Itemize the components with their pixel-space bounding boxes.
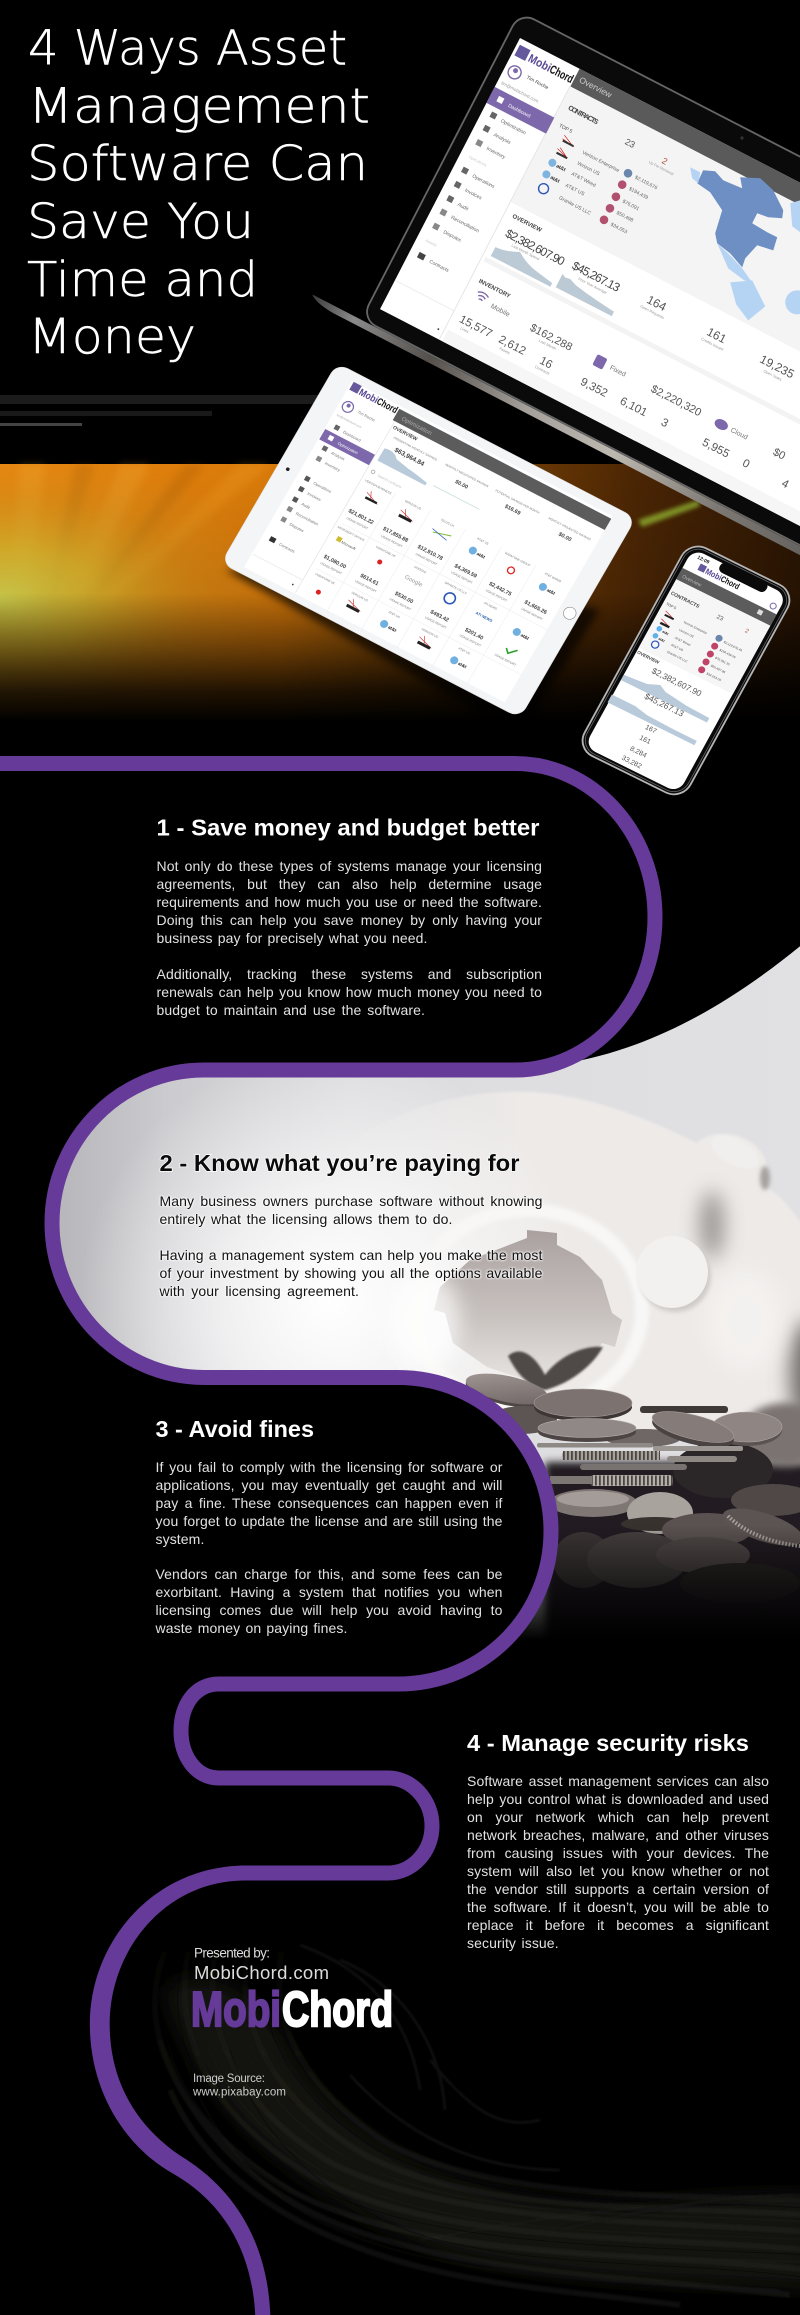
laptop sidebar: tim@mobichord.com <box>500 80 540 104</box>
phone overview <box>585 649 724 786</box>
tablet contract cards: VERIZON US <box>421 627 439 639</box>
phone mockup <box>576 540 796 800</box>
phone contracts: $34,053.05 <box>706 672 722 682</box>
section 3 text: licensing comes due will help you avoid having to <box>156 1602 502 1618</box>
phone logo <box>696 563 742 591</box>
photo backdrop <box>60 946 800 1636</box>
tablet sidebar: Inventory <box>324 461 341 473</box>
tablet contract cards: AT&T US <box>476 537 489 546</box>
heading: section 2: 2 - Know what you’re paying for <box>160 1150 520 1176</box>
tablet contract cards: USAGE REPORT <box>424 615 447 630</box>
tablet contract cards: TELUS CA <box>440 518 455 528</box>
tablet contract cards: MICROSOFT OFFICE <box>337 525 365 542</box>
overview panel: Open Tasks <box>763 369 782 382</box>
tablet body <box>221 363 636 718</box>
inventory panel: Cloud <box>729 427 749 442</box>
laptop sidebar: Analysis <box>492 132 512 146</box>
section 2 text: Many business owners purchase software without knowing <box>160 1193 542 1209</box>
tablet contract cards: $614.61 <box>359 573 379 587</box>
tablet contract cards: ATI NEWS <box>475 611 493 623</box>
phone frame <box>576 540 796 800</box>
heading: section 3: 3 - Avoid fines <box>156 1416 314 1442</box>
tablet contract cards: $1,665.26 <box>523 600 548 616</box>
tablet contract cards: at&t <box>476 551 486 560</box>
inventory panel <box>442 276 800 663</box>
tablet mockup <box>221 363 636 718</box>
image source credit: www.pixabay.com <box>192 2086 286 2098</box>
contracts panel: at&t <box>555 163 567 173</box>
overview panel: OVERVIEW <box>511 214 543 234</box>
purple ribbon path <box>0 764 655 2315</box>
contracts panel: $34,053 <box>609 222 628 235</box>
tablet contract cards: $17,855.88 <box>382 526 409 544</box>
phone contracts <box>639 579 770 694</box>
heading: section 1: 1 - Save money and budget better <box>156 814 540 840</box>
laptop header bar <box>570 69 800 412</box>
laptop sidebar: Dashboard <box>507 103 531 120</box>
MobiChord logo: Mobi <box>191 1983 281 2037</box>
phone contracts: 23 <box>715 614 725 623</box>
tablet contract cards: $493.42 <box>429 609 450 624</box>
tablet sidebar: Tim Roche <box>357 409 377 423</box>
inventory panel: 16 <box>537 355 554 371</box>
tablet contract cards: AT&T US <box>458 646 471 655</box>
section 3 text <box>156 1458 502 1636</box>
section 3 text: If you fail to comply with the licensing for software or <box>156 1458 502 1474</box>
section 4 text: network breaches, malware, and other viruses <box>467 1827 769 1843</box>
tablet contract cards: USAGE REPORT <box>380 534 403 548</box>
inventory panel: 2,612 <box>496 334 528 358</box>
piggy bank stopper <box>636 1236 711 1312</box>
tablet contract cards: $4,369.59 <box>453 563 478 580</box>
title: Money <box>28 309 196 365</box>
section 4 text <box>467 1773 769 1951</box>
tablet sidebar: Audit <box>300 501 312 510</box>
contracts panel: Granite US LLC <box>558 195 592 217</box>
heading: section 4: 4 - Manage security risks <box>467 1730 749 1756</box>
contracts panel: $50,498 <box>615 210 634 224</box>
coin pile <box>463 1368 800 1652</box>
section 4 text: security issue. <box>467 1935 559 1951</box>
laptop frame <box>362 12 800 686</box>
phone contracts: $50,497.96 <box>710 664 726 674</box>
tablet contract cards: at&t <box>457 661 468 669</box>
laptop sidebar: Invoices <box>464 188 483 202</box>
tablet sidebar: Mobi <box>357 387 380 406</box>
section 2 text: entirely what the licensing allows them to do. <box>160 1211 452 1227</box>
contracts panel: AT&T US <box>564 183 586 198</box>
laptop sidebar: Disputes <box>442 229 463 244</box>
phone screen <box>584 549 787 793</box>
section 1 text: Additionally, tracking these systems and subscription <box>156 966 542 982</box>
phone contracts: TOP 5 <box>665 602 677 610</box>
inventory panel: Mobile <box>489 303 511 319</box>
tablet sidebar: Optimization <box>337 441 359 455</box>
section 4 text: Software asset management services can also <box>467 1773 769 1789</box>
soft light behind text <box>109 1098 498 1384</box>
overview panel: 161 <box>705 325 729 346</box>
phone overview: 33,282 <box>620 755 643 770</box>
contracts panel: TOP 5 <box>558 123 573 135</box>
contracts panel: Verizon US <box>576 160 601 178</box>
tablet contract cards: VODAFONE GROUP <box>504 551 531 567</box>
tablet sidebar: Dashboard <box>342 429 362 443</box>
tablet overview row: $0.00 <box>454 479 469 491</box>
tablet overview row: $0.00 <box>557 532 572 543</box>
tablet sidebar: Analysis <box>330 450 346 461</box>
section 1 text: budget to maintain and use the software. <box>156 1002 425 1018</box>
phone notch <box>717 561 769 594</box>
phone contracts: Verizon US <box>678 628 695 639</box>
laptop sidebar: Chord <box>547 62 576 86</box>
contracts panel: Verizon Enterprise <box>581 150 620 174</box>
contracts panel: AT&T Wired <box>570 171 597 189</box>
section 1 text: Doing this can help you save money by only having your <box>156 912 542 928</box>
phone contracts: Verizon Enterprise <box>683 620 708 635</box>
section 4 text: the software. If it doesn’t, you will be able to <box>467 1899 769 1915</box>
section 4 text: help you control what is downloaded and used <box>467 1791 769 1807</box>
phone contracts: at&t <box>658 637 666 643</box>
tablet sidebar: Invoices <box>306 491 322 502</box>
inventory panel: Lines <box>459 326 469 334</box>
tablet contract cards: USAGE REPORT <box>450 570 474 585</box>
tablet contract cards: $201.40 <box>464 627 484 642</box>
section 2 text <box>158 1193 544 1300</box>
title <box>27 20 370 365</box>
tablet contract cards: USAGE REPORT <box>459 633 482 648</box>
laptop camera <box>740 136 744 140</box>
title: Time and <box>27 252 258 308</box>
tablet camera <box>285 467 290 472</box>
tablet contract cards: AT&T WIRED <box>544 572 563 584</box>
phone overview: 161 <box>638 735 652 746</box>
inventory panel: 6,101 <box>618 395 649 419</box>
contracts panel: Up For Renewal <box>648 160 674 176</box>
laptop screen <box>380 38 800 667</box>
laptop sidebar: Operations <box>468 154 488 168</box>
inventory panel: 15,577 <box>457 314 494 340</box>
laptop sidebar: Operations <box>471 173 496 190</box>
overview panel: Open Requests <box>639 304 665 320</box>
phone contracts: CONTRACTS <box>669 591 701 610</box>
tablet contract cards: $530.00 <box>393 591 414 605</box>
tablet screen <box>244 381 613 702</box>
tablet contract cards: GRANITE US LLC <box>444 581 468 596</box>
section 2 text: of your investment by showing you all the options available <box>160 1265 542 1281</box>
section 4 text: on your network which can help prevent <box>467 1809 769 1825</box>
phone overview: $45,267.13 <box>643 691 686 719</box>
tablet contract cards: USAGE REPORT <box>354 579 377 594</box>
phone header: Overview <box>681 574 703 589</box>
overview panel: $45,267.13 <box>570 258 623 295</box>
tablet contract cards: at&t <box>546 587 557 596</box>
tablet overview row: POTENTIAL SAVINGS PER MONTH <box>494 489 540 515</box>
contracts panel: $194,439 <box>628 186 649 201</box>
tablet contract cards: Microsoft <box>341 540 357 551</box>
tablet sidebar: Chord <box>374 397 399 416</box>
inventory panel: Assets <box>499 347 511 355</box>
section 1 text: renewals can help you know how much money you need to <box>156 984 542 1000</box>
tablet sidebar <box>245 381 403 593</box>
inventory panel: Last Month <box>538 339 557 351</box>
laptop sidebar: Optimization <box>499 118 527 136</box>
north america map <box>690 167 800 320</box>
tablet contract cards: USAGE REPORT <box>494 653 517 667</box>
tablet overview row: MONTHLY PROJECTED SAVINGS <box>548 516 592 541</box>
laptop sidebar: Reconciliation <box>450 215 480 234</box>
phone contracts: $2,119,676.44 <box>723 640 743 653</box>
inventory panel: Fixed <box>608 365 627 379</box>
contracts panel: CONTRACTS <box>567 105 600 126</box>
tablet contract cards: VERIZON BUSINESS <box>364 478 392 495</box>
tablet contract cards: VODAFONE UK <box>375 545 396 558</box>
tablet contract cards: $12,910.78 <box>416 544 444 562</box>
overview panel: Credits Issued <box>700 337 724 352</box>
hair texture footer <box>155 1915 800 2305</box>
piggy bank photo <box>60 946 800 1636</box>
contracts panel: $76,091 <box>621 199 640 212</box>
tablet home button <box>561 605 578 621</box>
section 4 text: the vendor still supports a certain version of <box>467 1881 769 1897</box>
section 3 text: you forget to update the license and are still using the <box>156 1512 502 1528</box>
section 1 text: agreements, but they can also help determine usage <box>156 876 542 892</box>
section 3 text: system. <box>156 1530 204 1546</box>
section 4 text: system will also let you know whether or not <box>467 1863 769 1879</box>
overview panel: $2,382,607.90 <box>503 226 568 269</box>
tablet overview row: PRESENTING MONTHLY SAVINGS <box>393 436 438 462</box>
section 3 text: Vendors can charge for this, and some fees can be <box>156 1566 502 1582</box>
inventory panel: INVENTORY <box>477 279 511 300</box>
tablet contract cards: at&t <box>387 625 398 633</box>
section 1 text <box>156 858 542 1018</box>
photo fade to black <box>447 1530 800 1684</box>
phone overview: 167 <box>644 724 658 735</box>
phone contracts: $194,439.06 <box>719 648 737 659</box>
laptop sidebar <box>380 43 577 340</box>
overview panel: 164 <box>645 293 669 314</box>
website name: MobiChord.com <box>194 1962 329 1983</box>
tablet contract cards: VODAFONE UK <box>314 572 336 585</box>
inventory panel: 5,955 <box>700 437 731 461</box>
tablet contract cards: $21,801.22 <box>347 508 374 526</box>
header stripes <box>0 395 320 426</box>
laptop sidebar: Audit <box>456 202 470 213</box>
phone overview: 8,284 <box>629 746 648 760</box>
tablet contract cards: at&t <box>520 633 530 641</box>
phone logo: Mobi <box>704 566 724 583</box>
section 4 text: replace it before it becomes a significant <box>467 1917 769 1933</box>
inventory panel: 9,352 <box>578 376 609 400</box>
laptop mockup <box>309 0 800 694</box>
tablet overview row <box>367 425 596 577</box>
piggy bank hole <box>434 1205 648 1408</box>
section 4 text: from causing issues with your devices. The <box>467 1845 769 1861</box>
phone contracts: Granite US LLC <box>666 650 689 664</box>
tablet shadow <box>225 560 600 735</box>
tablet overview row: OVERVIEW <box>392 425 419 443</box>
tablet contract cards: USAGE REPORT <box>319 561 343 576</box>
contracts panel: 2 <box>660 156 669 167</box>
inventory panel: $162,288 <box>528 322 574 354</box>
overview panel: Last Month Spend <box>511 244 540 261</box>
tablet contract cards: AT&T US <box>388 610 401 619</box>
tablet contract cards: VERIZON US <box>350 591 369 603</box>
tablet sidebar: Contracts <box>278 542 296 554</box>
tablet contract cards: USAGE REPORT <box>389 597 412 611</box>
laptop header bar: Overview <box>578 75 614 100</box>
hole shadow <box>508 1347 603 1390</box>
tablet sidebar: tim@mobichord.com <box>336 413 363 429</box>
phone overview: $2,382,607.90 <box>650 666 704 699</box>
phone contracts: at&t <box>661 630 670 636</box>
phone contracts: 2 <box>744 628 750 635</box>
tablet contract cards: $2,442.75 <box>488 581 512 598</box>
phone contracts: AT&T US <box>670 643 684 652</box>
section 3 text: waste money on paying fines. <box>156 1620 348 1636</box>
piggy bank body <box>444 1092 800 1430</box>
tablet sidebar: Disputes <box>289 522 305 533</box>
phone contracts: AT&T Wired <box>674 636 691 647</box>
contracts panel: at&t <box>549 175 561 185</box>
laptop sidebar: Inventory <box>485 146 507 161</box>
tablet contract cards: VERIZON US <box>404 499 422 511</box>
laptop sidebar: Tim Roche <box>525 75 550 91</box>
MobiChord logo <box>191 1983 393 2037</box>
tablet contract cards: ATI NEWS <box>483 601 498 611</box>
overview panel: 19,235 <box>758 352 797 381</box>
laptop sidebar: Mobi <box>526 51 554 75</box>
title: 4 Ways Asset <box>28 20 347 76</box>
image source credit <box>192 2073 286 2098</box>
contracts panel <box>511 87 800 528</box>
inventory panel: $2,220,320 <box>649 383 703 419</box>
tablet overview row: $16.69 <box>503 504 521 517</box>
section 3 text: applications, you may eventually get caught and will <box>156 1476 502 1492</box>
section 3 text: pay a fine. These consequences can happen even if <box>156 1494 502 1510</box>
inventory panel: 0 <box>740 457 751 471</box>
section 3 text: exorbitant. Having a system that notifies you when <box>156 1584 502 1600</box>
tablet contract cards: GOOGLE <box>414 565 427 574</box>
tablet contract cards: USAGE REPORT <box>520 607 544 621</box>
phone overview: OVERVIEW <box>636 650 661 665</box>
title: Management <box>28 78 370 134</box>
section 2 text: Having a management system can help you make the most <box>160 1247 542 1263</box>
tablet sidebar: Operations <box>312 481 332 494</box>
inventory panel: 3 <box>659 417 670 430</box>
MobiChord logo: Chord <box>282 1983 393 2037</box>
inventory panel: Contracts <box>534 365 550 376</box>
phone contracts: $76,091.30 <box>714 656 731 667</box>
section 1 text: Not only do these types of systems manage your licensing <box>156 858 542 874</box>
title: Save You <box>27 194 254 250</box>
tablet overview row: $63,964.84 <box>393 447 426 468</box>
tablet overview row: Search contracts <box>377 474 402 489</box>
overview panel <box>484 211 800 583</box>
phone status text: 12:09 <box>696 555 710 566</box>
tablet contract cards: Google <box>403 575 424 589</box>
tablet contract cards: USAGE REPORT <box>346 516 369 531</box>
header decorative sunburst <box>0 464 800 735</box>
contracts panel: 23 <box>623 137 637 150</box>
presented by label: Presented by: <box>194 1946 270 1960</box>
inventory panel: 4 <box>779 478 791 492</box>
section 1 text: requirements and how much you use or need the software. <box>156 894 542 910</box>
phone header <box>676 560 781 626</box>
tablet sidebar: Reconciliation <box>295 511 320 527</box>
tablet contract cards: $1,080.00 <box>322 554 347 570</box>
phone logo: Chord <box>719 574 742 591</box>
tablet contract cards: USAGE REPORT <box>485 588 508 603</box>
tablet contract cards <box>298 477 573 703</box>
tablet header <box>393 409 611 530</box>
laptop sidebar: Assets <box>425 238 438 248</box>
image source credit: Image Source: <box>193 2073 265 2085</box>
overview panel: Prior Year Average <box>577 277 607 295</box>
contracts panel: $2,119,676 <box>634 175 658 191</box>
section 2 text: with your licensing agreement. <box>160 1283 359 1299</box>
laptop base <box>309 294 800 580</box>
title: Software Can <box>27 136 368 192</box>
inventory panel: $0 <box>771 446 787 463</box>
tablet contract cards: USAGE REPORT <box>415 552 438 566</box>
laptop sidebar: Contracts <box>428 259 450 274</box>
tablet overview row: MONTHLY NEGOTIATED SAVINGS <box>444 463 489 488</box>
tablet header: Optimization <box>400 416 433 437</box>
section 1 text: business pay for precisely what you need. <box>156 930 428 946</box>
